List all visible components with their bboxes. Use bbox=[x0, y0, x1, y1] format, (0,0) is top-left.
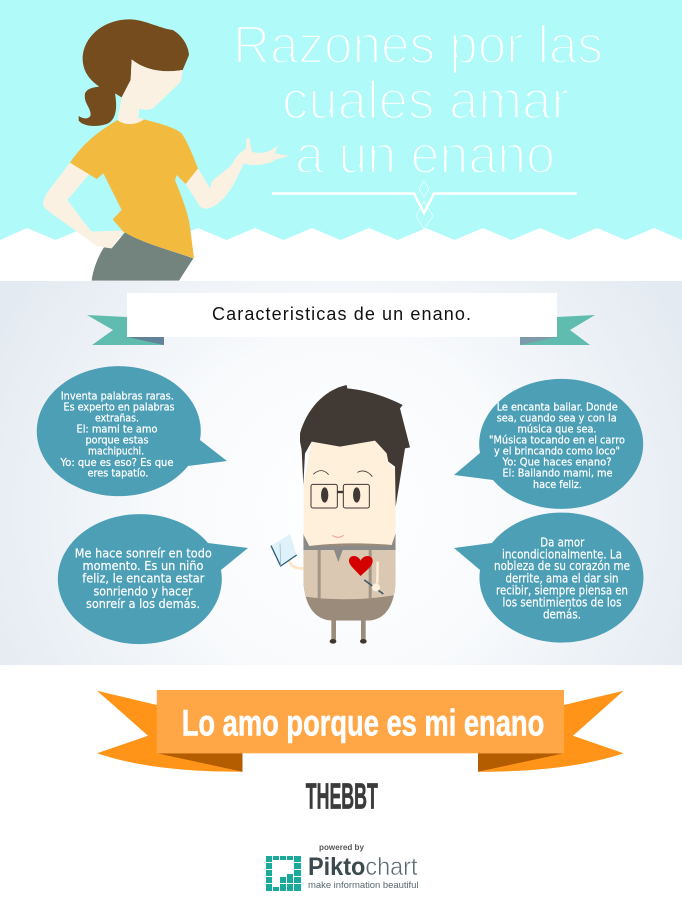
speech bubble: bailar: sea, cuando sea y con la bbox=[497, 411, 617, 424]
Piktochart logo mark bbox=[266, 856, 301, 891]
left arm with book bbox=[271, 534, 303, 568]
legs and feet bbox=[330, 618, 367, 644]
speech bubble: bailar: música que sea. bbox=[518, 422, 596, 435]
banner right tail bbox=[478, 691, 624, 772]
speech bubble: bailar: Le encanta bailar. Donde bbox=[497, 400, 618, 413]
speech bubble: amor incondicional: demás. bbox=[543, 606, 581, 621]
characteristics panel background bbox=[0, 281, 682, 665]
speech bubble: palabras raras: eres tapatío. bbox=[88, 467, 148, 480]
speech bubble: sonreir: sonreír a los demás. bbox=[86, 596, 200, 611]
speech bubble: bailar: "Música tocando en el carro bbox=[489, 434, 625, 447]
speech bubble: palabras raras bbox=[37, 366, 227, 496]
title: Razones por las bbox=[233, 15, 603, 75]
speech bubble: bailar: Yo: Que haces enano? bbox=[502, 456, 612, 469]
woman: left arm bbox=[43, 163, 124, 248]
speech bubble: sonreir: feliz, le encanta estar bbox=[82, 571, 205, 586]
speech bubble: amor incondicional: incondicionalmente. La bbox=[502, 546, 622, 561]
speech bubble: amor incondicional: derrite, ama el dar sin bbox=[506, 570, 618, 585]
header background bbox=[0, 0, 682, 240]
glasses bbox=[311, 484, 369, 508]
orange banner bbox=[97, 690, 624, 772]
face bbox=[304, 441, 396, 546]
heading text: Caracteristicas de un enano. bbox=[212, 304, 471, 324]
speech bubble: palabras raras: Yo: que es eso? Es que bbox=[60, 456, 174, 469]
speech bubble: palabras raras: El: mami te amo bbox=[76, 422, 158, 435]
illustration: enano character bbox=[271, 385, 410, 644]
Piktochart wordmark: Piktochart bbox=[308, 853, 418, 881]
woman: trousers bbox=[92, 232, 193, 281]
woman: shirt bbox=[70, 119, 198, 258]
ribbon right tail bbox=[520, 315, 595, 345]
right arm with pen bbox=[364, 562, 383, 594]
banner text: Lo amo porque es mi enano bbox=[182, 703, 544, 744]
speech bubble: palabras raras: Es experto en palabras bbox=[64, 400, 175, 413]
woman: face and neck bbox=[117, 59, 183, 126]
speech bubble: bailar: y el brincando como loco" bbox=[494, 445, 620, 458]
speech bubble: sonreir: Me hace sonreír en todo bbox=[75, 545, 212, 560]
heart bbox=[349, 556, 373, 576]
eyes and brows bbox=[313, 471, 372, 503]
heading ribbon bbox=[87, 293, 595, 345]
hair bbox=[300, 385, 410, 507]
woman: right arm bbox=[186, 137, 289, 209]
ribbon left tail bbox=[87, 315, 164, 345]
title: a un enano bbox=[295, 125, 555, 185]
speech bubble: palabras raras: extrañas. bbox=[95, 411, 139, 424]
text: THEBBT bbox=[306, 776, 378, 816]
title bbox=[233, 15, 603, 185]
Piktochart tagline: make information beautiful bbox=[308, 880, 418, 891]
speech bubble: palabras raras: porque estas bbox=[86, 434, 149, 447]
speech bubble: bailar: hace feliz. bbox=[533, 478, 582, 491]
speech bubble: sonreir: momento. Es un niño bbox=[82, 558, 204, 573]
powered by: powered by bbox=[319, 842, 364, 852]
title: cuales amar bbox=[282, 70, 569, 130]
speech bubble: amor incondicional: Da amor bbox=[540, 535, 585, 550]
speech bubble: sonreir bbox=[58, 514, 248, 644]
body bbox=[303, 533, 396, 623]
speech bubble: amor incondicional bbox=[454, 513, 643, 643]
speech bubble: amor incondicional: recibir, siempre piensa en bbox=[496, 582, 628, 597]
illustration: woman bbox=[43, 19, 289, 281]
mouth bbox=[332, 535, 344, 537]
speech bubble: palabras raras: machipuchi. bbox=[88, 445, 144, 458]
speech bubble: amor incondicional: nobleza de su corazón me bbox=[494, 558, 630, 573]
speech bubble: bailar bbox=[454, 379, 643, 509]
speech bubble: amor incondicional: los sentimientos de los bbox=[502, 594, 622, 609]
speech bubble: bailar: El: Bailando mami, me bbox=[502, 467, 613, 480]
woman: hair bbox=[79, 19, 189, 126]
title divider ornament bbox=[272, 181, 577, 229]
banner left tail bbox=[97, 691, 242, 772]
speech bubble: sonreir: sonriendo y hacer bbox=[94, 584, 193, 599]
speech bubble: palabras raras: Inventa palabras raras. bbox=[61, 389, 174, 402]
